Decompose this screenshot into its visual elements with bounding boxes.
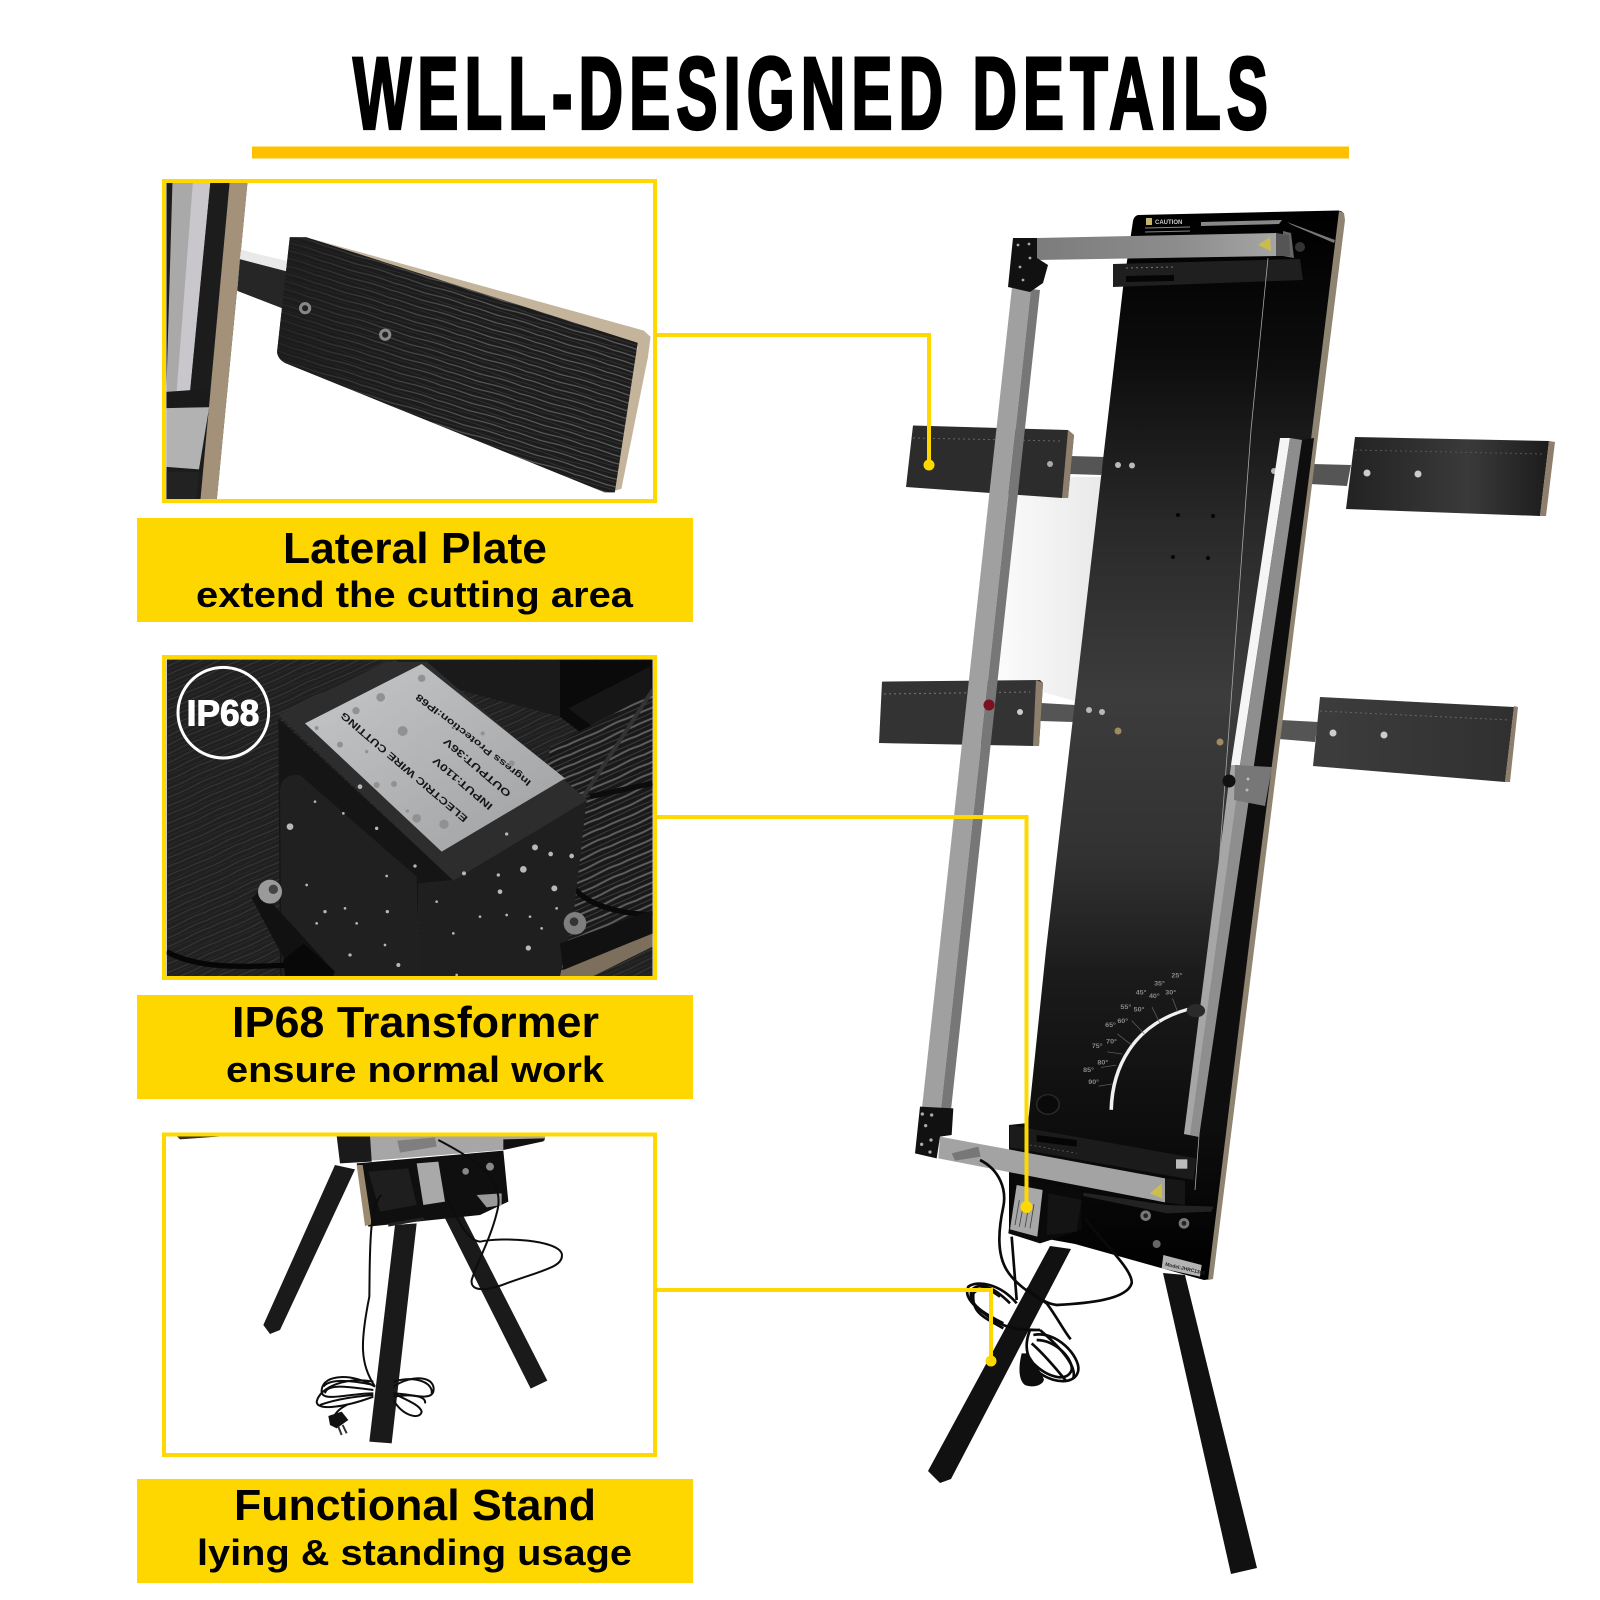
angle scale: 75° [1092,1043,1103,1050]
title underline [252,146,1349,158]
angle scale: 80° [1097,1059,1109,1066]
plug [1019,1353,1044,1386]
top caution label and rail: CAUTION [1155,220,1182,226]
lateral plate: upper left [906,426,1074,498]
slide block and knob [1222,765,1272,806]
water droplets on body [287,784,574,976]
white edge strip [1231,438,1290,765]
caption: lateral plate: extend the cutting area [196,574,634,615]
main board [1009,210,1345,1280]
top wire clamp [1276,233,1290,256]
angle scale: 60° [1117,1018,1128,1025]
panel: lateral plate photo [164,181,655,501]
red indicator lamp [984,700,994,710]
angle scale: 50° [1134,1006,1145,1013]
caption: functional stand [137,1479,693,1583]
warning triangle top [1258,237,1271,251]
angle scale: 55° [1120,1003,1132,1011]
white backing sheet [999,476,1101,701]
heated cutting wire [1195,258,1268,1190]
connector: transformer callout [657,817,1032,1213]
plug [328,1412,348,1435]
frame: bottom corner bracket [915,1107,953,1158]
lateral plate [237,237,651,492]
lateral plate arms [1040,456,1351,742]
transformer rating label: OUTPUT:36V [441,735,514,799]
caption: IP68 transformer [137,995,693,1099]
lateral plate: lower left [879,680,1043,746]
caption: IP68 transformer: ensure normal work [226,1049,605,1090]
IP68 badge [178,667,269,758]
angle scale: 90° [1088,1078,1099,1086]
angle scale: 30° [1165,989,1176,996]
stand legs [263,1165,547,1443]
transformer rating label [305,664,565,852]
power cables [967,1160,1132,1382]
transformer rating label: Ingress Protection:IP68 [414,692,533,788]
transformer rating label: INPUT:110V [431,754,495,811]
IP68 badge: IP68 [187,692,259,733]
top caution label and rail [1113,218,1335,287]
panel frame [164,1134,655,1455]
transformer body [278,662,587,976]
lateral plate: upper right [1346,437,1555,516]
angle scale: 70° [1106,1038,1117,1046]
transformer rating label: ELECTRIC WIRE CUTTING [339,709,470,824]
angle scale: 40° [1149,993,1160,1000]
panel: IP68 transformer photo [164,657,655,978]
frame: top horizontal bar [1037,233,1276,260]
panel frame [164,657,655,978]
connector: lateral plate callout [657,335,934,470]
panel: functional stand photo [164,1134,655,1455]
connector: stand callout [653,1290,996,1366]
panel frame [164,181,655,501]
angle scale: 35° [1154,980,1165,988]
machine edge with ruler [166,183,247,499]
power cable [167,943,335,976]
caption: functional stand: lying & standing usage [197,1532,632,1573]
angle scale: 65° [1105,1021,1116,1029]
angle scale: 25° [1171,972,1183,980]
lower bracket: Model:JHRC1300 [1165,1262,1206,1277]
water droplets on label [315,675,515,829]
angle scale: 85° [1083,1066,1094,1074]
folded machine underside [337,1136,545,1227]
frame: top corner bracket [1008,238,1048,292]
bottom assembly [915,1107,1213,1386]
frame: vertical bar [922,287,1040,1110]
lower bracket [1083,1193,1213,1277]
power cords [317,1140,562,1418]
bottom rail [1010,1125,1197,1180]
angle scale [1037,972,1205,1114]
connector [952,1147,981,1161]
caption: IP68 transformer: IP68 Transformer [232,998,599,1047]
caption: functional stand: Functional Stand [234,1481,596,1530]
warning triangle bottom [1150,1183,1162,1198]
angle scale: 45° [1136,989,1147,996]
transformer [1008,1178,1082,1243]
caption: lateral plate: Lateral Plate [283,524,547,573]
lateral plate: lower right [1313,697,1518,782]
mounting bolts [252,880,653,976]
ruler fence [1184,438,1302,1137]
caption: lateral plate [137,518,693,622]
main product: foam cutter on stand [879,210,1555,1574]
frame: bottom bar [938,1137,1165,1202]
stand legs [928,1246,1257,1574]
